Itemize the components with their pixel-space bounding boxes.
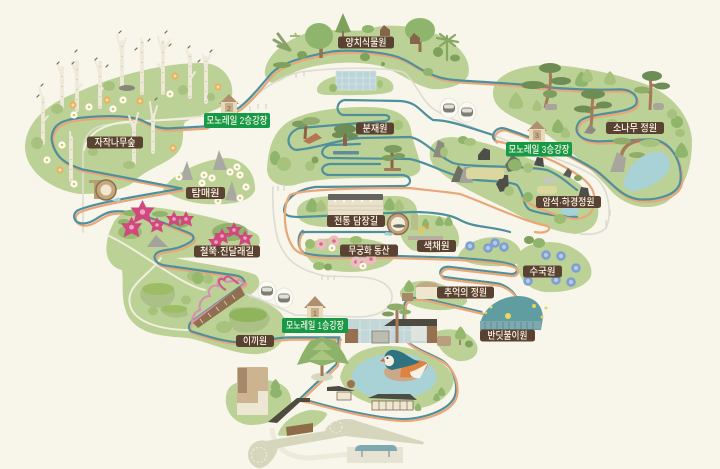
label: 철쭉·진달래길: 철쭉·진달래길	[200, 245, 254, 258]
panel: entrance green patch	[278, 410, 327, 436]
panel: fern garden island	[265, 26, 469, 89]
icon: greenhouse	[329, 71, 383, 92]
monorail routes	[52, 51, 682, 421]
panel: island beside visitor centre	[435, 329, 478, 361]
dark covered bridge	[268, 398, 310, 423]
bonsai and rock garden teal lines	[289, 100, 577, 190]
label: 분재원	[356, 122, 394, 135]
label: 색채원: 색채원	[424, 240, 450, 253]
panel: azalea and moss garden island	[106, 207, 286, 354]
panel: colour garden island	[400, 215, 459, 253]
label: 추억의 정원: 추억의 정원	[444, 286, 487, 299]
label: 모노레일 3승강장: 모노레일 3승강장	[508, 143, 570, 156]
label: 이끼원: 이끼원	[243, 335, 267, 348]
pine by building	[382, 304, 411, 343]
icon: station 1 house	[304, 296, 326, 318]
label: 분재원: 분재원	[362, 122, 388, 135]
icon: station 1 house: 1	[313, 311, 317, 318]
entrance building	[237, 367, 282, 415]
label: 수국원	[523, 265, 562, 278]
icon: station 3 house	[527, 121, 547, 142]
panel: birch forest island	[25, 63, 232, 194]
label: 모노레일 1승강장	[282, 318, 348, 333]
label: 무궁화 동산: 무궁화 동산	[348, 245, 390, 257]
memory garden building	[402, 280, 440, 301]
panel: hydrangea hill	[458, 237, 522, 266]
icon: heart arch bridge	[192, 277, 245, 328]
label: 탐매원	[186, 187, 225, 200]
bonsai trees	[270, 117, 405, 171]
label: 양치식물원	[338, 36, 394, 49]
visitor centre building	[345, 319, 437, 343]
colour garden with windmill wheel	[384, 214, 453, 240]
rocks in rock garden	[433, 136, 590, 224]
icon: station 3 house: 3	[535, 133, 539, 140]
fern garden plants	[273, 13, 460, 76]
monorail track lines	[83, 68, 610, 330]
entrance ground paths	[248, 419, 424, 468]
moss garden	[140, 271, 270, 333]
icon: station 2 house: 2	[227, 106, 231, 113]
pond with mandarin duck island	[327, 346, 454, 411]
panel: rose of sharon hill island	[305, 238, 395, 272]
bench	[286, 423, 313, 436]
panel: traditional wall path island	[297, 196, 417, 227]
rose of sharon flowers	[305, 236, 376, 270]
hydrangea flowers	[465, 236, 581, 287]
birch forest flowers and bushes	[31, 72, 222, 188]
panel: memory garden island	[400, 281, 467, 310]
label: 탐매원: 탐매원	[192, 187, 220, 200]
label: 이끼원	[236, 335, 274, 348]
label: 소나무 정원: 소나무 정원	[613, 122, 657, 135]
panel: pine garden island	[493, 65, 692, 207]
label: 모노레일 2승강장	[204, 113, 270, 128]
icon: monorail cars	[258, 98, 476, 308]
label: 전통 담장길: 전통 담장길	[334, 215, 378, 228]
plum garden stones and blossoms	[175, 150, 250, 205]
big tree near station 1	[297, 337, 349, 381]
label: 자작나무숲: 자작나무숲	[94, 137, 136, 149]
birch trees	[37, 31, 212, 180]
traditional wall	[306, 194, 404, 215]
azalea plants	[118, 200, 253, 250]
icon: water wheel	[89, 180, 120, 201]
label: 수국원: 수국원	[530, 265, 556, 278]
panel: plum garden island	[163, 158, 255, 204]
icon: firefly dome	[480, 296, 548, 330]
label: 모노레일 3승강장	[506, 142, 572, 156]
panel: bonsai garden island	[267, 107, 420, 186]
panel: entrance building island	[226, 380, 291, 425]
blue shelter	[347, 445, 403, 463]
icon: mandarin duck	[380, 350, 428, 382]
label: 모노레일 1승강장: 모노레일 1승강장	[286, 319, 344, 332]
label: 모노레일 2승강장: 모노레일 2승강장	[206, 114, 268, 127]
icon: station 2 house	[219, 94, 239, 113]
pine garden pond	[624, 152, 670, 191]
pine garden bushes	[509, 69, 688, 158]
icon: pavilions	[327, 380, 417, 410]
panel: rock garden island	[430, 137, 598, 234]
label: 색채원	[417, 240, 456, 253]
panel: greenhouse island	[317, 75, 393, 95]
label: 반딧불이원: 반딧불이원	[488, 329, 528, 342]
island details beside building	[437, 326, 473, 348]
panel: hydrangea garden island	[517, 242, 591, 292]
label: 양치식물원: 양치식물원	[346, 36, 386, 49]
label: 암석·하경정원: 암석·하경정원	[542, 196, 594, 209]
pine trees	[521, 63, 670, 172]
